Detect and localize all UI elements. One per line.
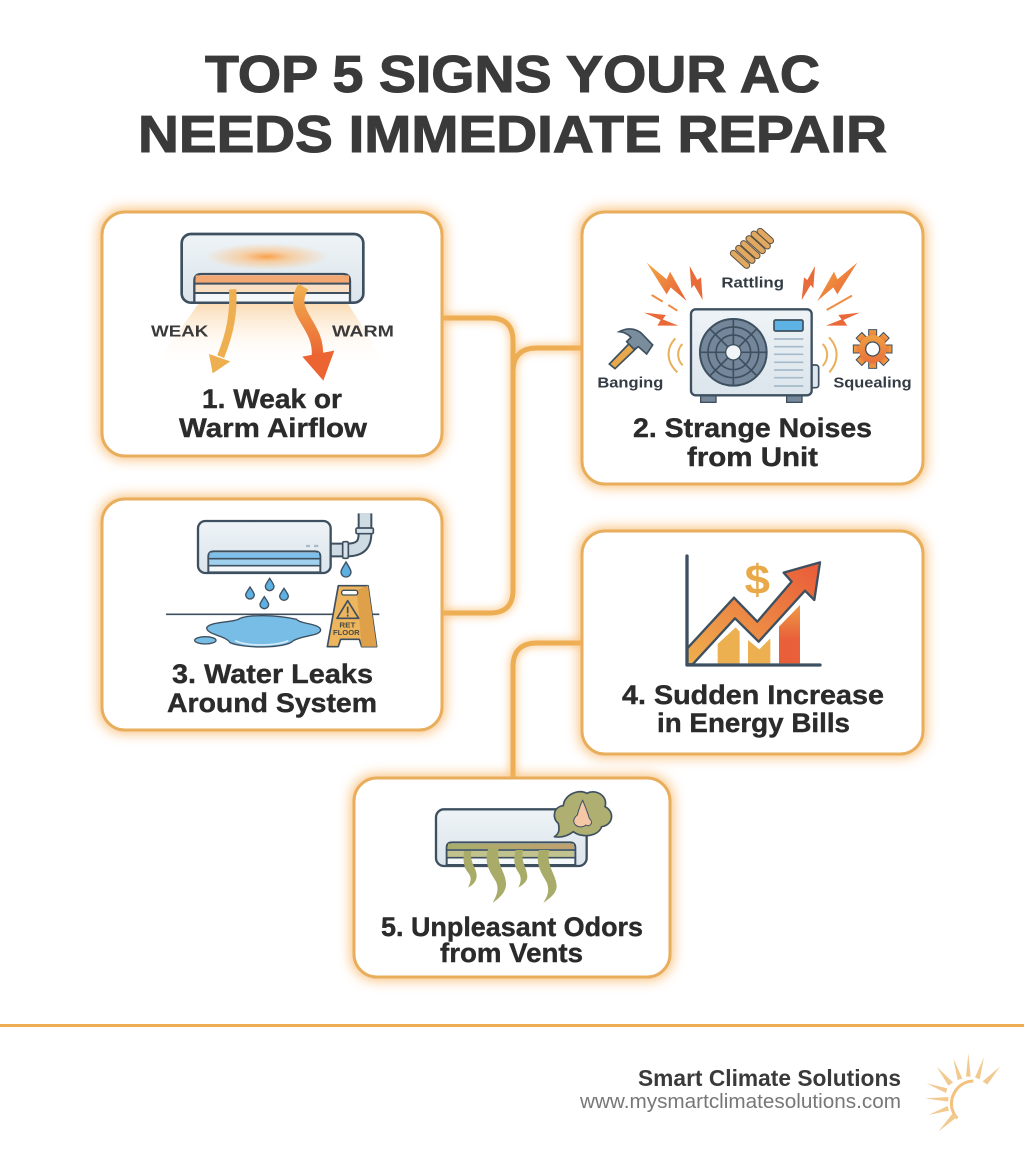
icon: rising cost chart: $ (745, 556, 770, 603)
title: NEEDS IMMEDIATE REPAIR (138, 106, 887, 164)
heading: sign 4 (622, 680, 884, 738)
title: TOP 5 SIGNS YOUR AC (205, 46, 820, 104)
panel: strange noises (579, 209, 926, 487)
heading: sign 3 (167, 659, 377, 718)
heading: sign 1 (179, 384, 368, 443)
panel: unpleasant odors (351, 775, 673, 980)
footer brand text: Smart Climate Solutions (638, 1065, 901, 1091)
labels: noise types: Rattling (721, 275, 784, 291)
panel: weak or warm airflow (99, 209, 445, 459)
labels: noise types: Squealing (833, 376, 912, 392)
heading: sign 3: Around System (167, 688, 377, 718)
icon: leaking AC, puddle and wet floor sign: RET (339, 620, 356, 629)
footer brand text (579, 1065, 901, 1113)
heading: sign 2 (633, 413, 872, 472)
heading: sign 2: 2. Strange Noises (633, 413, 872, 443)
heading: sign 3: 3. Water Leaks (172, 659, 373, 689)
footer rule (0, 1024, 1024, 1027)
label: warm: WARM (332, 324, 394, 341)
labels: noise types (597, 275, 912, 392)
icon: indoor AC with weak and warm airflow (151, 234, 394, 381)
connectors (443, 318, 581, 777)
panel: water leaks (99, 496, 445, 733)
icon: outdoor condenser unit (691, 309, 819, 402)
icon: AC with odor and nose (436, 792, 612, 903)
heading: sign 2: from Unit (687, 442, 818, 472)
icon: rising cost chart (687, 556, 820, 665)
label: weak: WEAK (151, 324, 209, 341)
heading: sign 1: 1. Weak or (202, 384, 342, 414)
heading: sign 5 (381, 912, 643, 968)
icon: sun logo (925, 1053, 1000, 1132)
labels: noise types: Banging (597, 376, 663, 392)
heading: sign 5: 5. Unpleasant Odors (381, 912, 643, 942)
heading: sign 1: Warm Airflow (179, 413, 368, 443)
panel: energy bills (579, 528, 926, 757)
icon: hammer (609, 329, 653, 369)
icon: leaking AC, puddle and wet floor sign: FLOOR (333, 628, 360, 637)
footer brand text: www.mysmartclimatesolutions.com (579, 1091, 901, 1113)
icon: gear (853, 330, 892, 368)
icon: noise bolts and sound waves (644, 263, 860, 372)
heading: sign 4: in Energy Bills (657, 708, 850, 738)
title (138, 46, 887, 164)
icon: leaking AC, puddle and wet floor sign (166, 513, 379, 647)
icon: spring (729, 227, 775, 270)
heading: sign 4: 4. Sudden Increase (622, 680, 884, 710)
heading: sign 5: from Vents (440, 938, 583, 968)
